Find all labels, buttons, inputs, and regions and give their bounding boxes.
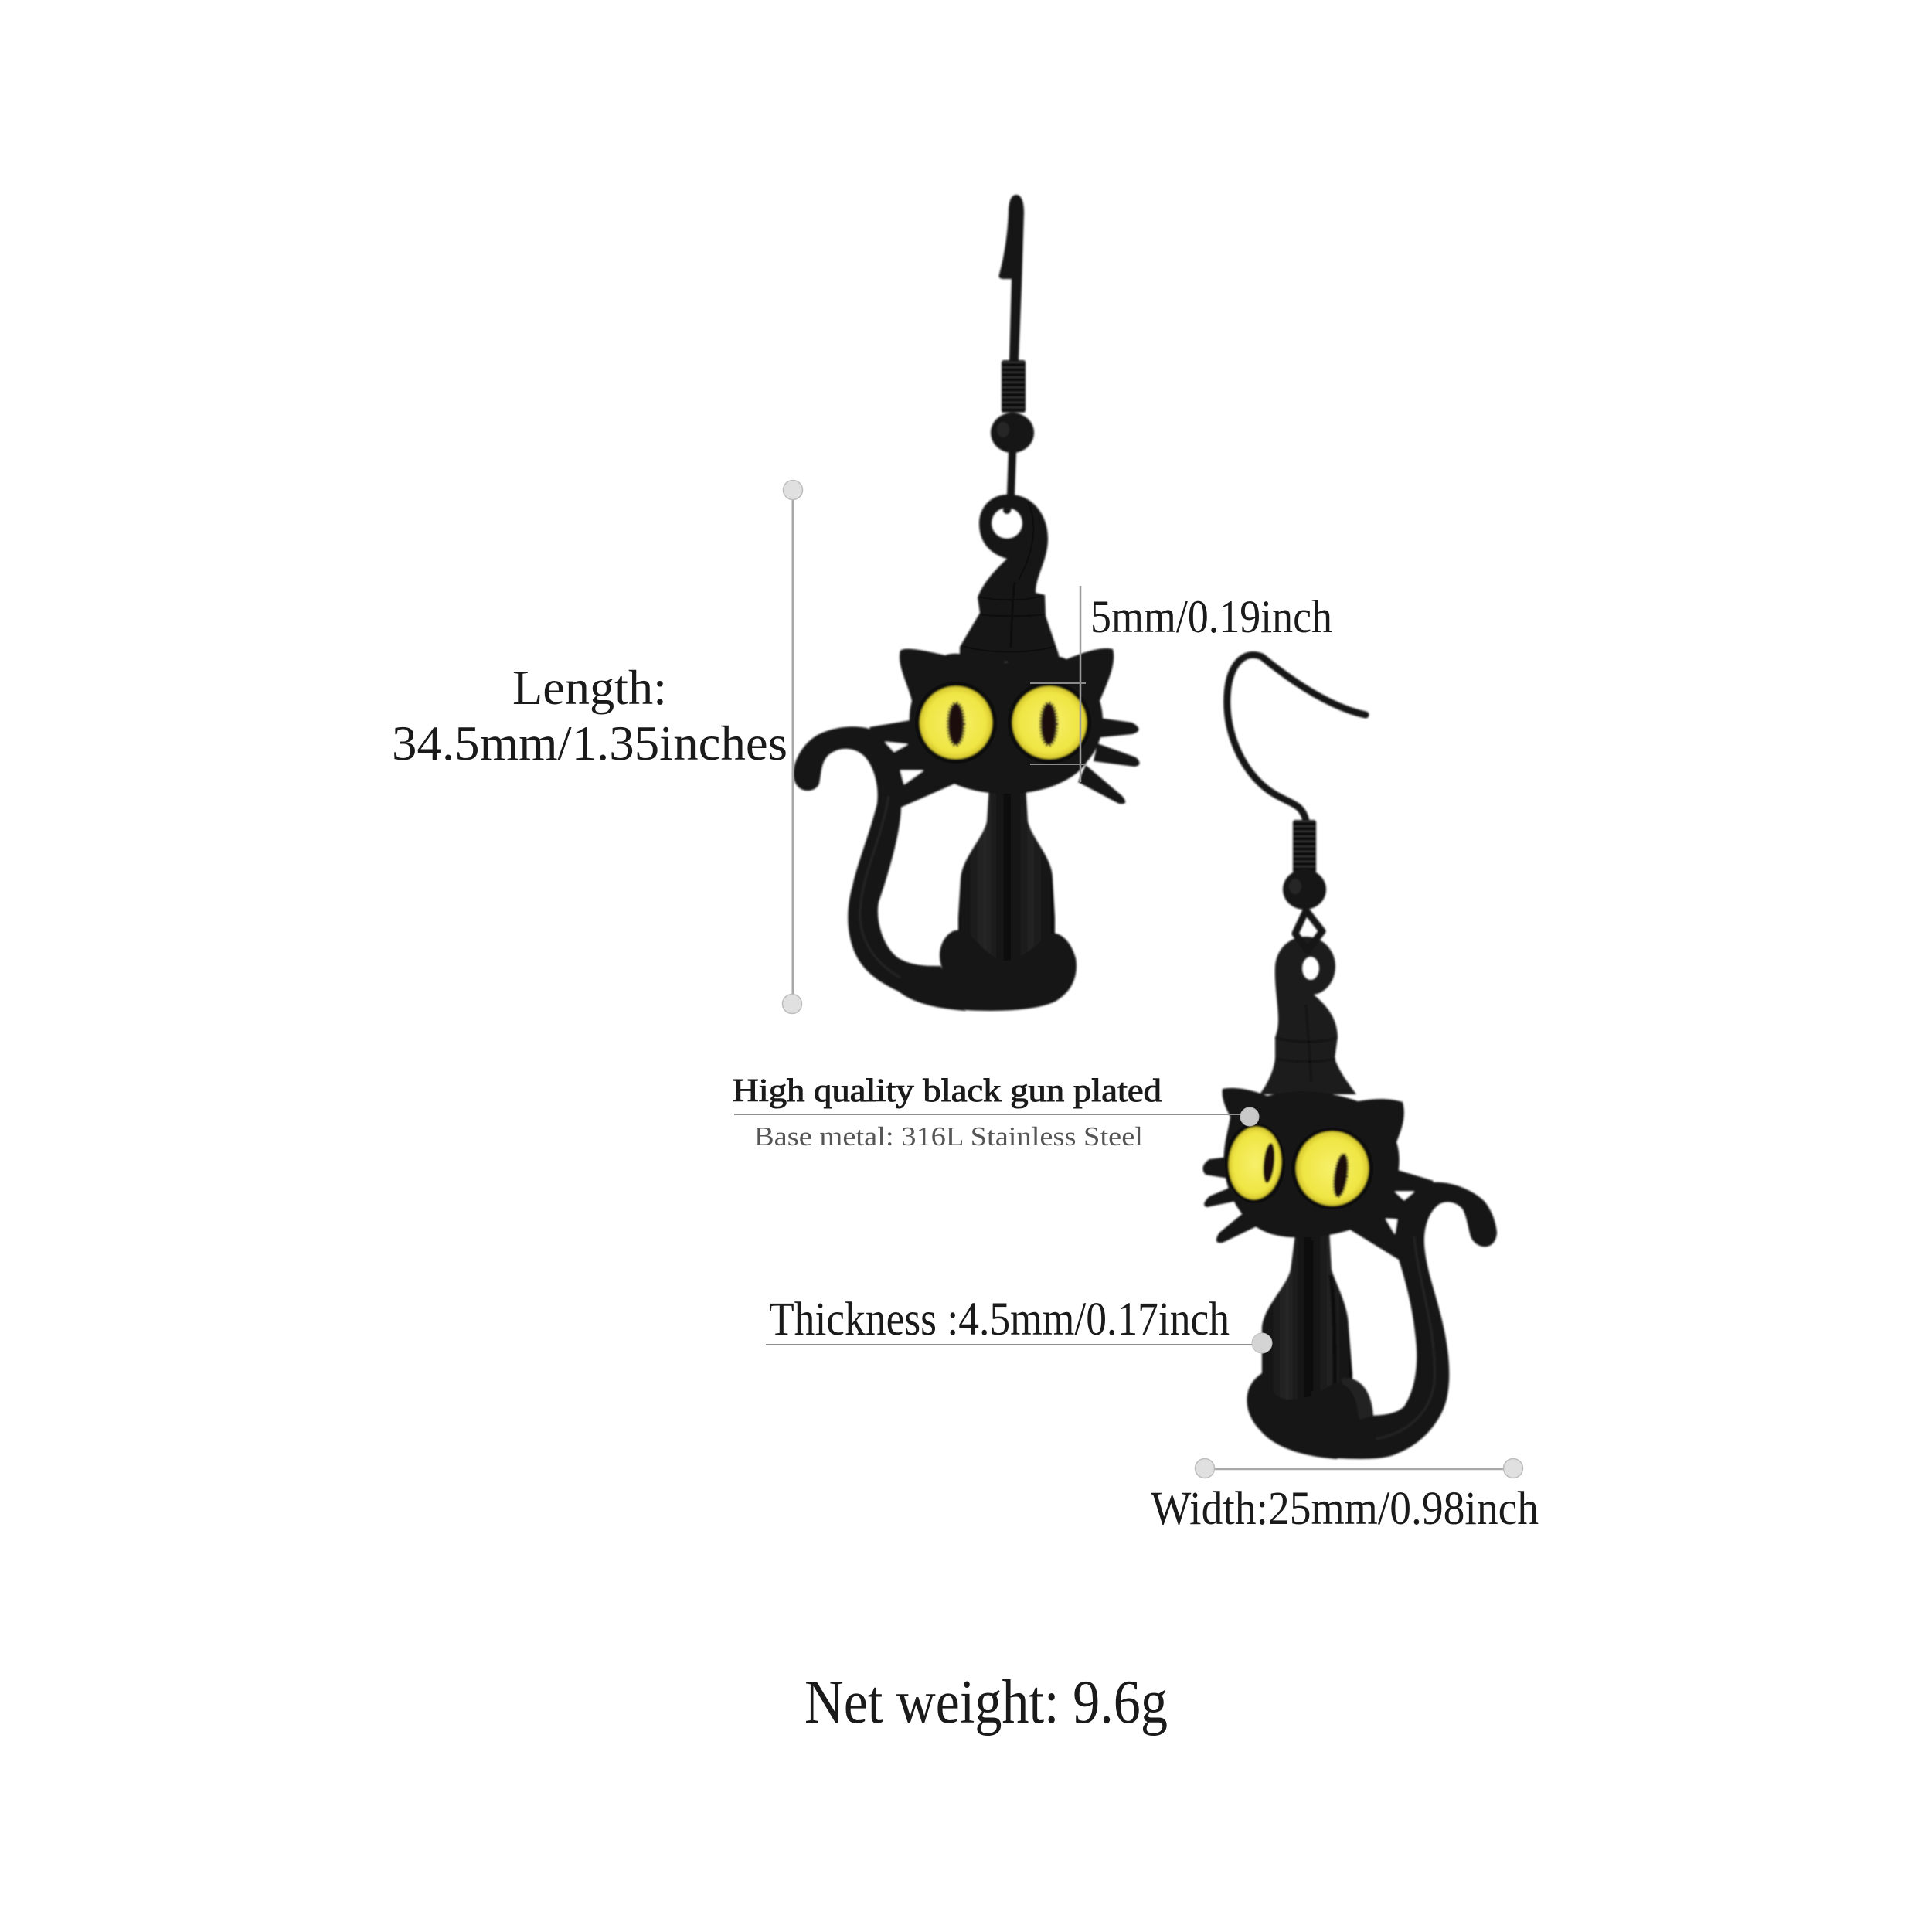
witch hat with swirl — [1260, 937, 1356, 1094]
bead — [991, 413, 1034, 453]
earring: side-facing cat — [1202, 655, 1497, 1459]
text: length label: 34.5mm/1.35inches — [392, 716, 787, 770]
body seams — [1311, 1240, 1335, 1391]
tail highlight — [1376, 1236, 1434, 1439]
jump link — [1295, 910, 1322, 951]
whisker lattice — [869, 719, 958, 808]
earring: front-facing cat — [794, 195, 1140, 1011]
left eye — [915, 682, 997, 764]
whiskers — [1078, 717, 1140, 804]
seat lump — [1341, 1378, 1373, 1422]
text: width label: Width:25mm/0.98inch — [1151, 1483, 1539, 1535]
hook coil — [1002, 360, 1026, 413]
right eye — [1008, 682, 1091, 764]
callout: plating: High quality black gun plated — [733, 1073, 1162, 1109]
hat shading — [1275, 1005, 1337, 1082]
ear hook — [1227, 655, 1366, 821]
text: length label — [392, 660, 787, 770]
whiskers — [1202, 1157, 1260, 1243]
cat body — [1262, 1229, 1352, 1410]
tail — [794, 726, 966, 1011]
text: eye size label: 5mm/0.19inch — [1090, 591, 1332, 642]
cat base and paws — [1247, 1373, 1360, 1459]
text: net weight: Net weight: 9.6g — [804, 1668, 1168, 1736]
body centre seam — [1003, 796, 1009, 961]
callout: plating — [733, 1073, 1259, 1151]
cat base and paws — [940, 930, 1077, 1011]
dimension: width bracket — [1195, 1459, 1522, 1478]
right eye — [1291, 1128, 1373, 1209]
cat head — [1223, 1088, 1404, 1237]
callout: thickness: Thickness :4.5mm/0.17inch — [769, 1294, 1230, 1345]
tail highlight — [860, 796, 900, 978]
jump link — [1007, 452, 1012, 510]
callout: plating: Base metal: 316L Stainless Steel — [754, 1121, 1143, 1151]
cat body — [958, 784, 1055, 974]
dimension: eye size bracket — [1030, 586, 1086, 782]
left eye — [1225, 1123, 1285, 1203]
dimension: length bracket — [782, 481, 802, 1014]
ear hook — [998, 195, 1024, 360]
bead — [1283, 869, 1326, 910]
witch hat with swirl — [960, 495, 1059, 662]
text: length label: Length: — [512, 660, 667, 715]
hook coil — [1293, 820, 1316, 875]
tail — [1335, 1182, 1497, 1459]
hat shading — [962, 502, 1056, 652]
whisker lattice — [1349, 1167, 1434, 1260]
cat head — [900, 648, 1114, 794]
